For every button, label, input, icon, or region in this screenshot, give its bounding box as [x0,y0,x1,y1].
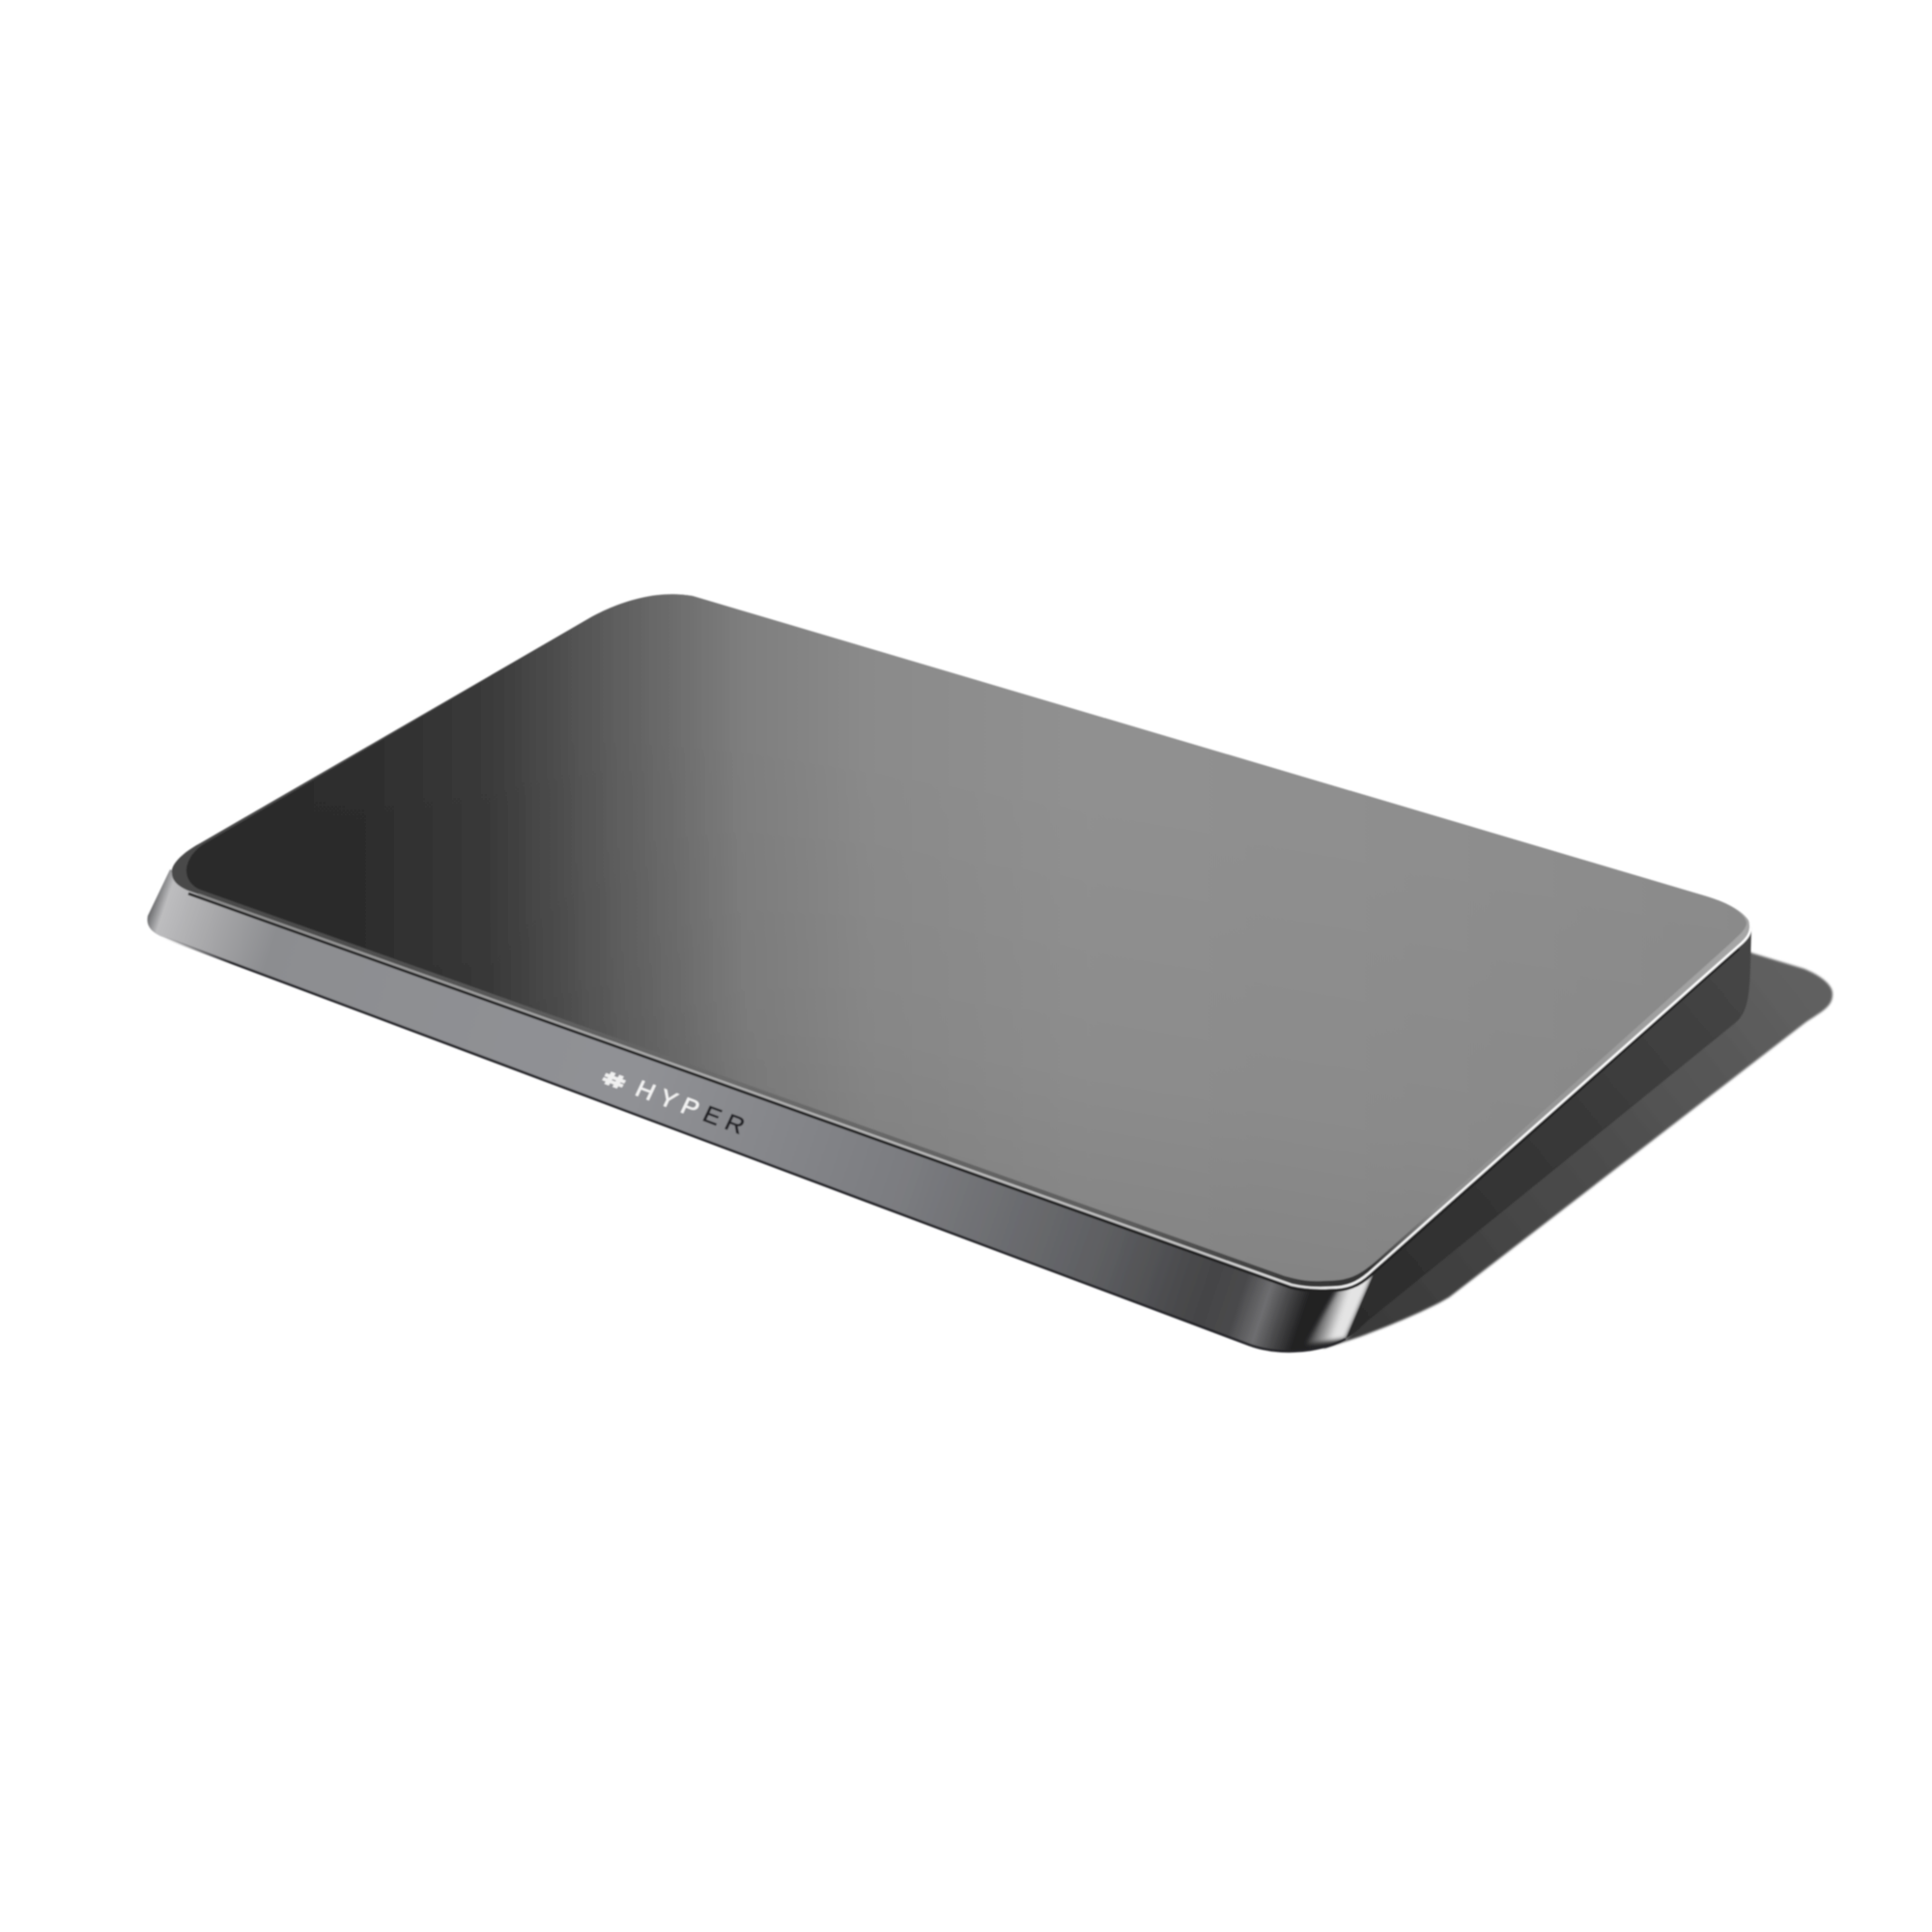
rim base [172,594,1751,1288]
device body [148,594,1751,1351]
dark line under rim [188,894,1739,1291]
cast shadow [1323,942,1833,1349]
bottom edge line [160,936,1346,1351]
bright edge highlight [198,895,1750,1288]
corner highlight [1306,1271,1375,1345]
glass surface [186,594,1747,1281]
HYPER text: HYPER [632,1076,755,1142]
right side wall [1346,930,1751,1339]
glass lower shading [186,594,1747,1281]
icon: hash mark [601,1070,628,1090]
front side wall [148,869,1381,1351]
top glass face [172,594,1751,1291]
logo: HYPER wordmark [601,1070,755,1142]
